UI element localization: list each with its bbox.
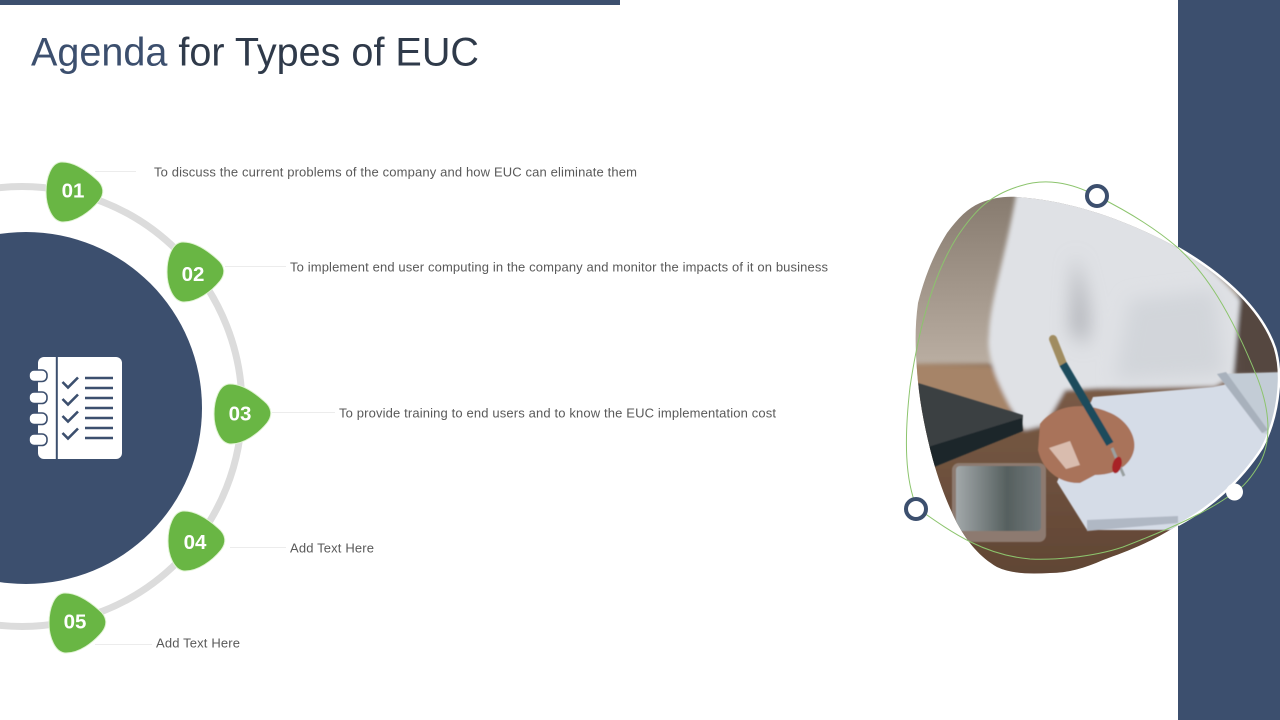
decorative ring xyxy=(0,186,242,626)
central circle xyxy=(0,232,202,584)
item 03 xyxy=(214,384,776,444)
table surface xyxy=(920,362,1225,574)
photo white outline xyxy=(1178,248,1279,525)
phone xyxy=(952,463,1046,542)
item 01 xyxy=(46,162,637,222)
photo: hand writing in notebook xyxy=(905,190,1280,585)
item 02: 02 xyxy=(182,263,204,286)
item 03: To provide training to end users and to know the EUC implementation cost xyxy=(339,406,776,420)
item 02 xyxy=(167,242,828,302)
item 01: To discuss the current problems of the company and how EUC can eliminate them xyxy=(154,164,637,180)
title: Agenda for Types of EUC xyxy=(31,30,479,74)
top accent bar xyxy=(0,0,620,5)
hand xyxy=(1038,406,1134,483)
dark background at right xyxy=(1232,295,1280,375)
item 04: 04 xyxy=(184,531,207,554)
red fingernail xyxy=(1112,456,1122,474)
item 01: 01 xyxy=(62,180,84,202)
green orbit line xyxy=(906,182,1268,559)
item 05 xyxy=(49,593,240,653)
item 05: 05 xyxy=(64,610,86,634)
pen xyxy=(1053,339,1063,364)
item 04 xyxy=(168,511,374,571)
sweater shading xyxy=(1070,255,1089,345)
notebook xyxy=(1056,384,1267,531)
book xyxy=(918,382,1024,447)
icon: checklist notebook xyxy=(29,357,122,459)
right side panel xyxy=(1178,0,1280,720)
node: left ring xyxy=(906,499,926,519)
item 05: Add Text Here xyxy=(156,636,240,650)
node: top ring xyxy=(1087,186,1107,206)
item 04: Add Text Here xyxy=(290,540,374,556)
item 03: 03 xyxy=(229,402,251,426)
sweater xyxy=(988,190,1240,430)
item 02: To implement end user computing in the company and monitor the impacts of it on business xyxy=(290,260,828,274)
node: white dot xyxy=(1226,484,1243,500)
